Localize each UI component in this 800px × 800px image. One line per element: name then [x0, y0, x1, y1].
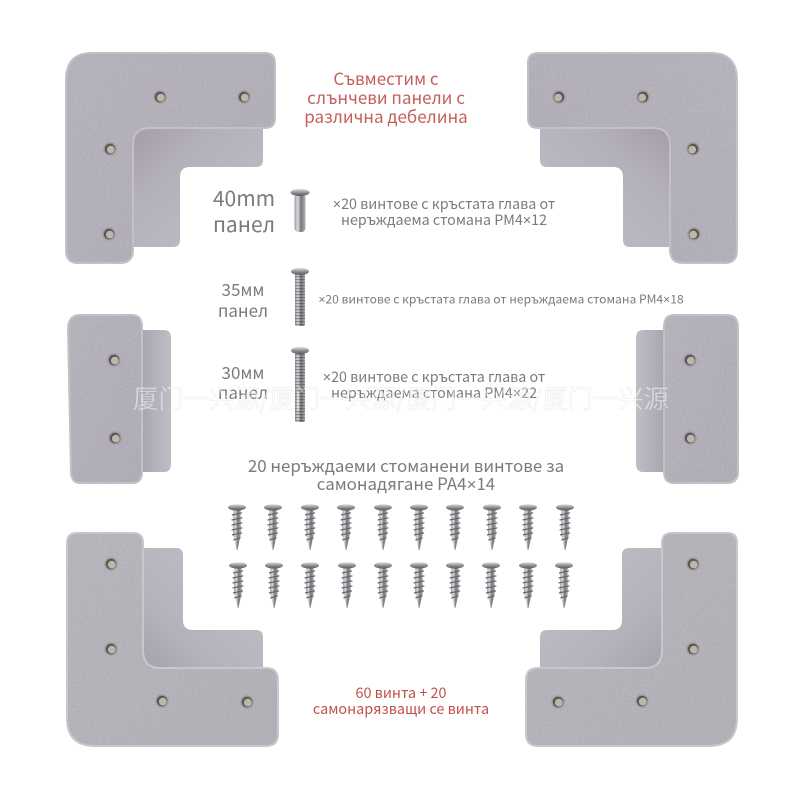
bracket: top right corner	[528, 53, 737, 263]
screw: PM4×12	[290, 189, 310, 232]
description: PM4×12 screws: ×20 винтове с кръстата глава от	[333, 193, 555, 214]
label: 40mm panel: 40mm	[213, 183, 275, 213]
heading: self-tapping screws	[248, 452, 564, 495]
heading: self-tapping screws: самонадягане PA4×14	[317, 470, 495, 495]
description: PM4×18 screws: ×20 винтове с кръстата глава от неръждаема стомана PM4×18	[318, 290, 684, 308]
label: 35mm panel: панел	[218, 297, 268, 322]
screws: self-tapping bottom row	[229, 562, 573, 608]
note: total screw count: самонарязващи се винта	[313, 698, 489, 719]
bracket: middle right	[636, 315, 738, 483]
description: PM4×22 screws: ×20 винтове с кръстата глава от	[323, 366, 545, 387]
description: PM4×22 screws	[323, 366, 545, 403]
description: PM4×22 screws: неръждаема стомана PM4×22	[331, 382, 537, 403]
heading: compatibility note: различна дебелина	[304, 103, 468, 128]
label: 30mm panel: панел	[218, 379, 268, 404]
label: 30mm panel	[218, 359, 268, 404]
bracket: bottom left corner	[67, 533, 278, 746]
heading: compatibility note: Съвместим с	[333, 65, 439, 90]
label: 35mm panel: 35мм	[222, 276, 264, 301]
heading: self-tapping screws: 20 неръждаеми стоманени винтове за	[248, 452, 564, 477]
heading: compatibility note: слънчеви панели с	[307, 84, 465, 109]
label: 40mm panel: панел	[213, 209, 275, 239]
description: PM4×12 screws: неръждаема стомана PM4×12	[341, 209, 547, 230]
label: 30mm panel: 30мм	[222, 359, 264, 384]
screw: PM4×18	[291, 268, 309, 326]
label: 40mm panel	[213, 183, 275, 239]
note: total screw count: 60 винта + 20	[355, 682, 447, 703]
description: PM4×12 screws	[333, 193, 555, 230]
watermark: 厦门一兴源/厦门一兴源/厦门一兴源/厦门一兴源	[133, 380, 669, 416]
screw: PM4×22	[291, 347, 309, 422]
screws: self-tapping top row	[228, 504, 574, 550]
bracket: top left corner	[66, 53, 275, 263]
label: 35mm panel	[218, 276, 268, 322]
bracket: bottom right corner	[526, 533, 737, 746]
bracket: middle left	[68, 315, 171, 483]
heading: compatibility note	[304, 65, 468, 128]
note: total screw count	[313, 682, 489, 719]
